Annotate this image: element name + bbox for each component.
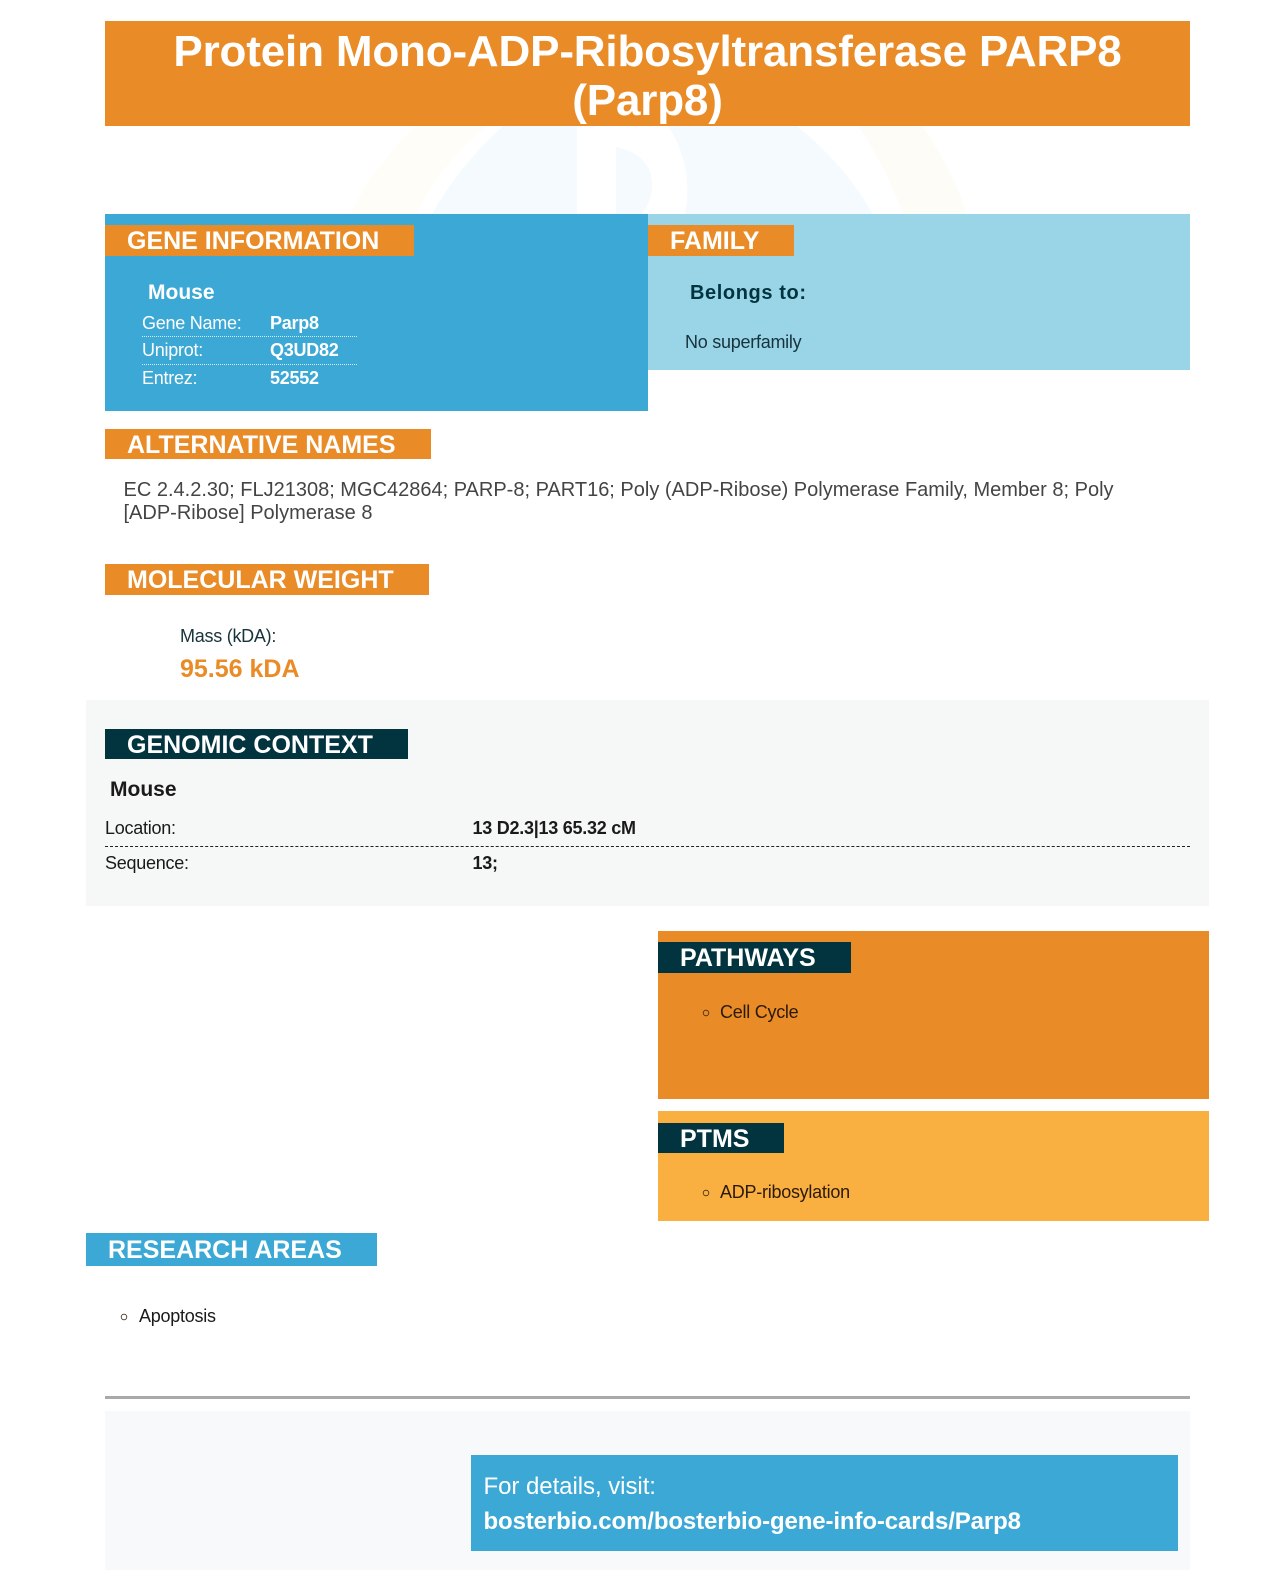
entrez row: Entrez: bbox=[142, 368, 197, 388]
heading: pathways bbox=[658, 942, 851, 973]
heading: family bbox=[648, 225, 794, 256]
panel: gene information bbox=[105, 214, 648, 411]
species: mouse: Mouse bbox=[110, 778, 177, 801]
alternative names text bbox=[124, 479, 1114, 524]
uniprot row: Q3UD82 bbox=[270, 340, 338, 360]
footer rule bbox=[105, 1396, 1190, 1399]
callout url: bosterbio.com/bosterbio-gene-info-cards/Parp8 bbox=[484, 1508, 1021, 1535]
callout: details link bbox=[471, 1455, 1178, 1551]
location row: Location: bbox=[105, 818, 176, 838]
sequence row: Sequence: bbox=[105, 853, 189, 873]
heading: pathways: PATHWAYS bbox=[680, 944, 816, 972]
location row bbox=[105, 817, 1190, 847]
panel: family bbox=[648, 214, 1190, 370]
title banner: (Parp8) bbox=[572, 76, 723, 125]
panel: genomic context bbox=[86, 700, 1209, 906]
entrez row bbox=[142, 368, 319, 388]
gene name row: Gene Name: bbox=[142, 313, 241, 333]
background watermark logo bbox=[432, 126, 872, 214]
alternative names text: EC 2.4.2.30; FLJ21308; MGC42864; PARP-8; PART16; Poly (ADP-Ribose) Polymerase Family, Member 8; Poly bbox=[124, 479, 1114, 501]
ptm item: ADP-ribosylation bbox=[720, 1182, 850, 1202]
panel: pathways bbox=[658, 931, 1209, 1099]
title banner bbox=[105, 21, 1190, 126]
alternative names text: [ADP-Ribose] Polymerase 8 bbox=[124, 502, 372, 524]
gene name row bbox=[142, 312, 357, 337]
heading: ptms bbox=[658, 1123, 784, 1153]
uniprot row bbox=[142, 339, 357, 365]
species: mouse: Mouse bbox=[148, 281, 215, 304]
sequence row bbox=[105, 853, 498, 873]
sequence row: 13; bbox=[472, 853, 498, 873]
heading: molecular weight: MOLECULAR WEIGHT bbox=[127, 566, 394, 594]
panel: ptms bbox=[658, 1111, 1209, 1221]
title banner: Protein Mono-ADP-Ribosyltransferase PARP8 bbox=[173, 27, 1122, 76]
family value: No superfamily bbox=[685, 332, 801, 352]
heading: gene information: GENE INFORMATION bbox=[127, 227, 379, 255]
heading: research areas: RESEARCH AREAS bbox=[108, 1236, 342, 1264]
research area item: Apoptosis bbox=[139, 1306, 216, 1326]
heading: alternative names: ALTERNATIVE NAMES bbox=[127, 431, 396, 459]
panel: footer bbox=[105, 1411, 1190, 1570]
belongs to label: Belongs to: bbox=[690, 282, 807, 304]
entrez row: 52552 bbox=[270, 368, 319, 388]
callout label: For details, visit: bbox=[484, 1473, 656, 1500]
gene name row: Parp8 bbox=[270, 313, 319, 333]
location row: 13 D2.3|13 65.32 cM bbox=[472, 818, 636, 838]
mass value: 95.56 kDA bbox=[180, 655, 300, 683]
heading: ptms: PTMS bbox=[680, 1125, 749, 1153]
uniprot row: Uniprot: bbox=[142, 340, 203, 360]
pathway item: Cell Cycle bbox=[720, 1002, 798, 1022]
heading: genomic context: GENOMIC CONTEXT bbox=[127, 731, 373, 759]
heading: family: FAMILY bbox=[670, 227, 759, 255]
mass label: Mass (kDA): bbox=[180, 626, 276, 646]
heading: research areas bbox=[86, 1233, 377, 1266]
